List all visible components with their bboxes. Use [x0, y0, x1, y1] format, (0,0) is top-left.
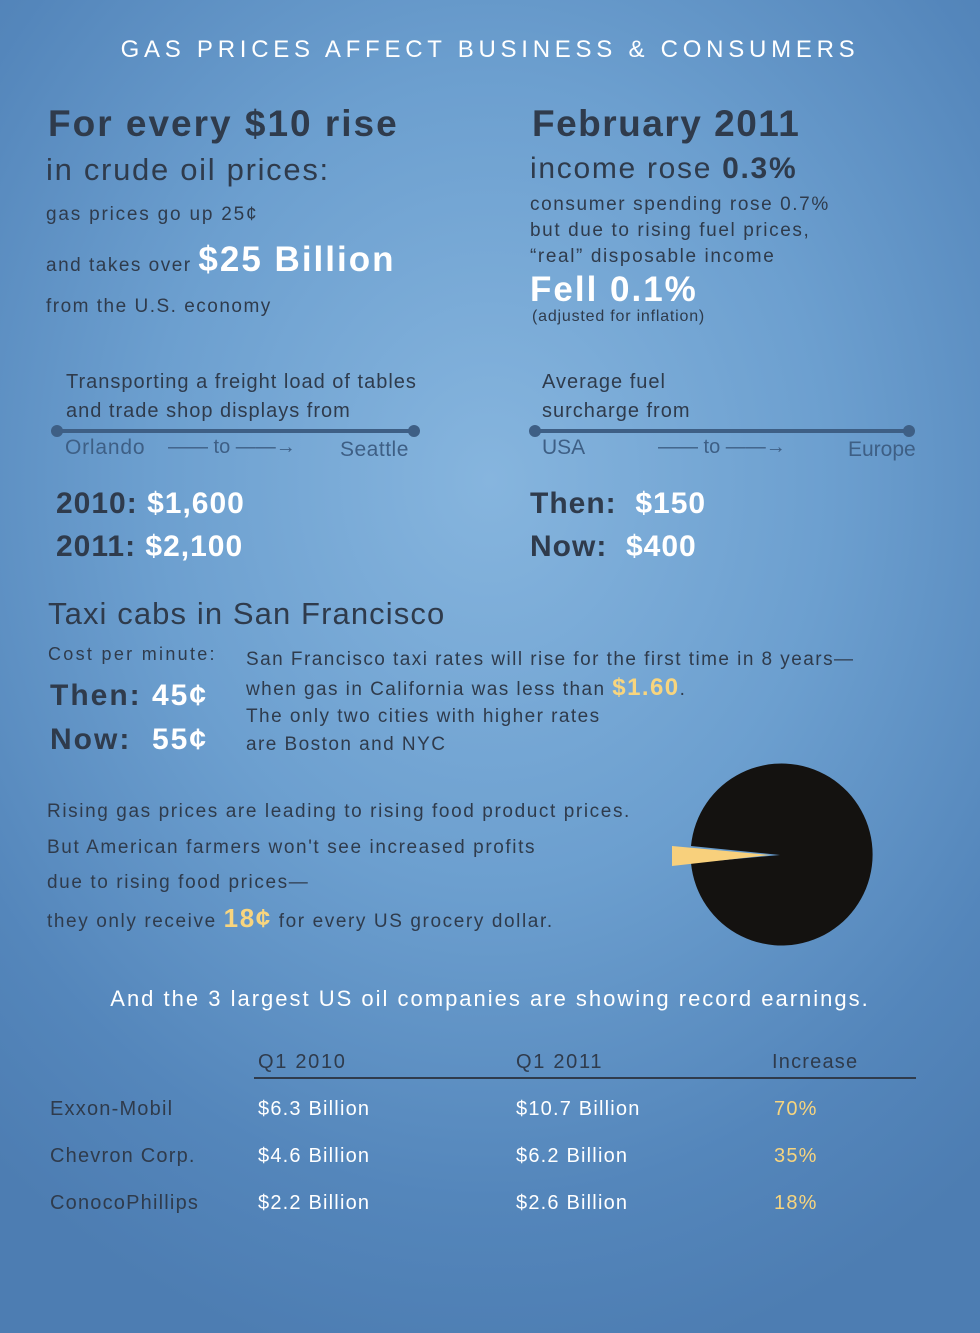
panel: freight: —— to ——→ — [168, 436, 296, 458]
table: ConocoPhillips — [50, 1192, 199, 1214]
taxi text: are Boston and NYC — [246, 734, 446, 754]
text block: but due to rising fuel prices, — [530, 220, 810, 241]
income: income rose 0.3% — [530, 152, 797, 185]
panel: freight — [51, 371, 420, 563]
route line — [529, 425, 915, 437]
heading: February 2011 — [532, 103, 800, 144]
prices: 2010: $1,600 — [56, 487, 245, 520]
prices: 2011: $2,100 — [56, 530, 243, 563]
text: farmers: Rising gas prices are leading to rising food product prices. — [47, 801, 631, 822]
panel: fuel surcharge: Europe — [848, 438, 916, 461]
prices: Now: $400 — [530, 530, 697, 563]
table: Exxon-Mobil — [50, 1098, 173, 1120]
taxi text: when gas in California was less than $1.60. — [246, 674, 686, 700]
panel: taxi — [48, 596, 854, 756]
table: Q1 2011 — [516, 1051, 603, 1073]
subheading: oil companies: And the 3 largest US oil companies are showing record earnings. — [110, 986, 870, 1011]
text block — [530, 194, 830, 267]
panel: freight: Transporting a freight load of tables — [66, 371, 417, 393]
table: Chevron Corp. — [50, 1145, 196, 1167]
text: farmers — [47, 801, 631, 932]
taxi text: The only two cities with higher rates — [246, 706, 601, 727]
prices: Then: $150 — [530, 487, 706, 520]
text: gas prices: gas prices go up 25¢ — [46, 204, 258, 225]
panel: fuel surcharge: surcharge from — [542, 400, 690, 422]
table: 70% — [774, 1098, 818, 1120]
panel: freight: Seattle — [340, 438, 409, 461]
panel: taxi: Cost per minute: — [48, 644, 217, 664]
panel: freight: Orlando — [65, 436, 145, 459]
table: $2.2 Billion — [258, 1192, 370, 1214]
text: farmers: But American farmers won't see increased profits — [47, 836, 536, 858]
taxi prices: Now: 55¢ — [50, 723, 208, 756]
note: (adjusted for inflation) — [532, 308, 705, 325]
table: 18% — [774, 1192, 818, 1214]
prices — [56, 487, 245, 563]
table: $10.7 Billion — [516, 1098, 641, 1120]
text: billion: and takes over $25 Billion — [46, 240, 395, 279]
subheading: in crude oil prices: — [46, 152, 330, 187]
panel: freight: and trade shop displays from — [66, 400, 351, 422]
table: $4.6 Billion — [258, 1145, 370, 1167]
table: Q1 2010 — [258, 1051, 347, 1073]
panel: fuel surcharge: USA — [542, 436, 585, 459]
table: $2.6 Billion — [516, 1192, 628, 1214]
text block: consumer spending rose 0.7% — [530, 194, 830, 215]
taxi text: San Francisco taxi rates will rise for the first time in 8 years— — [246, 649, 854, 670]
prices — [530, 487, 706, 563]
title: GAS PRICES AFFECT BUSINESS & CONSUMERS — [121, 36, 859, 63]
panel: fuel surcharge: Average fuel — [542, 371, 666, 393]
table: $6.2 Billion — [516, 1145, 628, 1167]
table — [50, 1051, 916, 1214]
taxi prices — [50, 679, 208, 756]
text: economy: from the U.S. economy — [46, 296, 272, 317]
heading: For every $10 rise — [48, 103, 399, 144]
heading: Taxi cabs in San Francisco — [48, 596, 445, 631]
route line — [51, 425, 420, 437]
fell: Fell 0.1% — [530, 270, 698, 309]
text: farmers: they only receive 18¢ for every US grocery dollar. — [47, 902, 554, 932]
panel: crude oil — [46, 103, 399, 317]
text: farmers: due to rising food prices— — [47, 872, 309, 893]
taxi prices: Then: 45¢ — [50, 679, 208, 712]
panel: february 2011 — [530, 103, 830, 325]
table: $6.3 Billion — [258, 1098, 370, 1120]
taxi text — [246, 649, 854, 754]
pie chart — [672, 764, 873, 946]
text block: “real” disposable income — [530, 246, 775, 267]
panel: fuel surcharge: —— to ——→ — [658, 436, 786, 458]
table: Increase — [772, 1051, 858, 1073]
table: 35% — [774, 1145, 818, 1167]
panel: fuel surcharge — [529, 371, 916, 563]
